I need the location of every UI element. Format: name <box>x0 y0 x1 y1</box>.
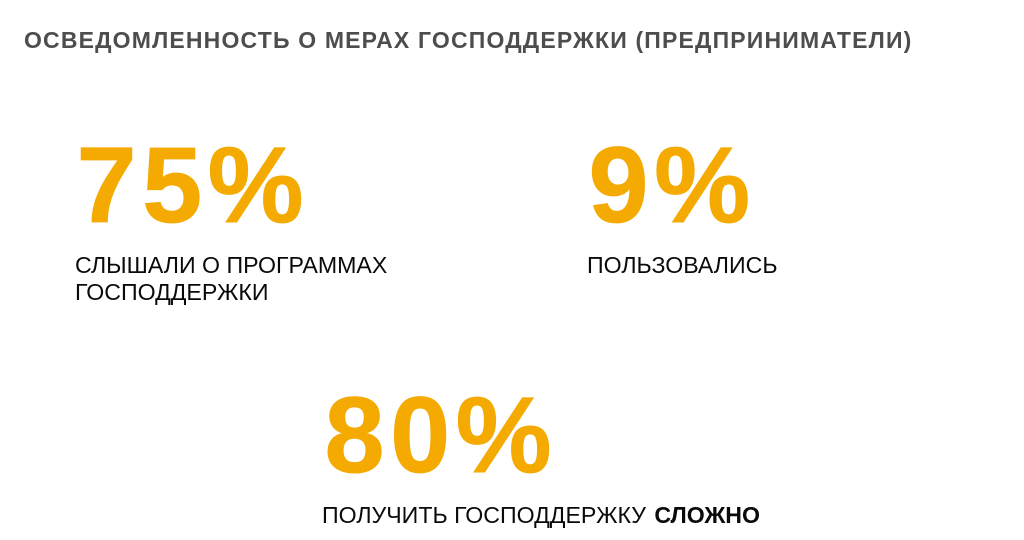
label: 9%: ПОЛЬЗОВАЛИСЬ <box>587 252 778 278</box>
label: 75% <box>75 252 387 305</box>
label: 75%: СЛЫШАЛИ О ПРОГРАММАХ <box>75 252 387 278</box>
stat: 9%: 9% <box>588 124 756 245</box>
label: 80%: ПОЛУЧИТЬ ГОСПОДДЕРЖКУ СЛОЖНО <box>322 502 760 528</box>
title: ОСВЕДОМЛЕННОСТЬ О МЕРАХ ГОСПОДДЕРЖКИ (ПРЕДПРИНИМАТЕЛИ) <box>24 27 912 53</box>
stat: 75%: 75% <box>76 124 309 245</box>
stat: 80%: 80% <box>324 374 557 495</box>
label: 75%: ГОСПОДДЕРЖКИ <box>75 279 268 305</box>
